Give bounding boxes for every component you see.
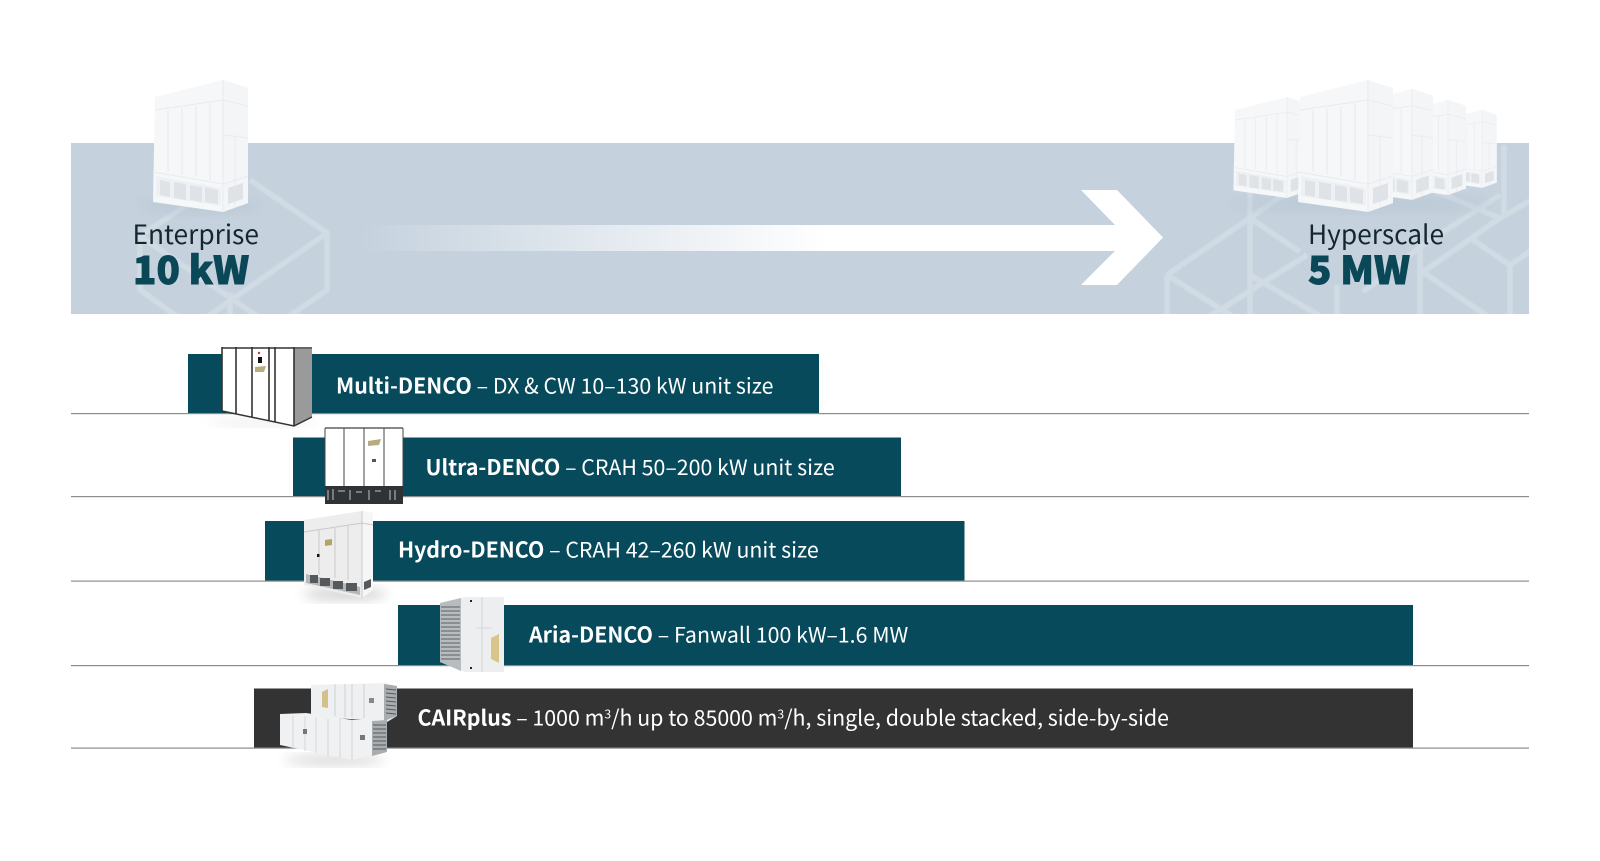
icon: Aria-DENCO unit xyxy=(440,597,504,672)
label: enterprise 10 kW: 10 kW xyxy=(133,240,249,296)
label: hyperscale 5 MW: 5 MW xyxy=(1308,240,1410,296)
row: CAIRplus: /h up to 85000 m xyxy=(611,702,777,732)
icon: enterprise unit xyxy=(138,80,262,213)
icon: CAIRplus unit xyxy=(280,683,397,760)
arrow xyxy=(360,190,1163,285)
row: Ultra-DENCO xyxy=(71,427,1529,504)
background pattern xyxy=(138,146,1529,314)
row: Ultra-DENCO: Ultra-DENCO – CRAH 50–200 kW unit size xyxy=(426,451,835,482)
row: Multi-DENCO xyxy=(71,347,1529,426)
icon: Ultra-DENCO unit xyxy=(325,427,403,504)
row: CAIRplus: CAIRplus – 1000 m xyxy=(418,702,604,732)
icon: hyperscale units xyxy=(1230,80,1497,212)
row: Multi-DENCO: Multi-DENCO – DX & CW 10–130 kW unit size xyxy=(336,370,774,400)
label: enterprise 10 kW xyxy=(132,213,259,296)
icon: Multi-DENCO unit xyxy=(222,347,312,426)
row: CAIRplus xyxy=(71,683,1529,765)
row: CAIRplus: /h, single, double stacked, side-by-side xyxy=(784,702,1169,732)
icon: Hydro-DENCO unit xyxy=(304,511,373,598)
label: hyperscale 5 MW xyxy=(1308,213,1444,296)
row: CAIRplus: 3 xyxy=(604,704,611,722)
panel: scale band xyxy=(71,143,1529,314)
row: Hydro-DENCO xyxy=(71,511,1529,600)
row: CAIRplus: 3 xyxy=(777,704,784,722)
row: Aria-DENCO: Aria-DENCO – Fanwall 100 kW–1.6 MW xyxy=(528,618,909,650)
label: hyperscale 5 MW: Hyperscale xyxy=(1308,213,1444,252)
label: enterprise 10 kW: Enterprise xyxy=(132,213,259,252)
row: Aria-DENCO xyxy=(71,597,1529,672)
row: Hydro-DENCO: Hydro-DENCO – CRAH 42–260 kW unit size xyxy=(398,534,819,564)
